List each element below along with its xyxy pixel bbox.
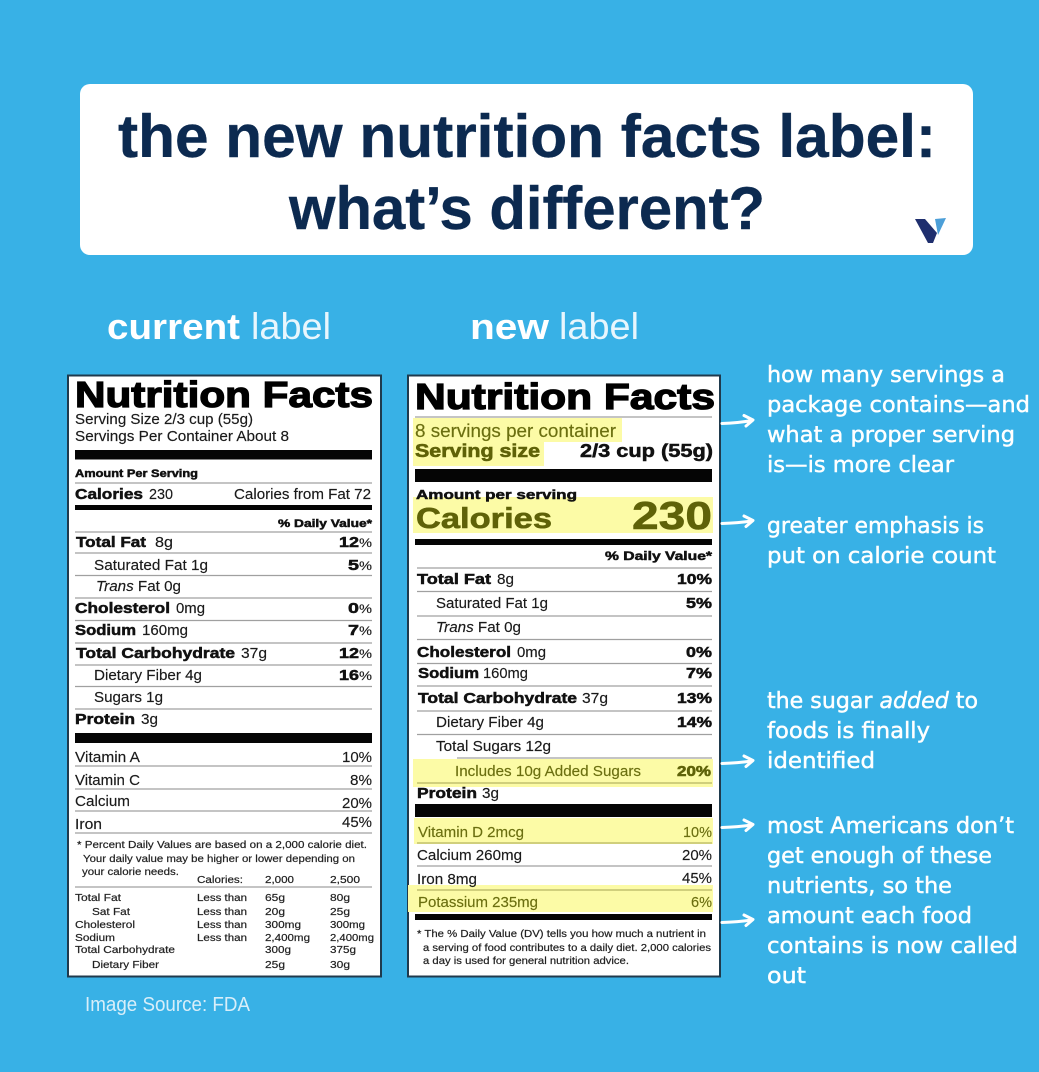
callout: nutrients xyxy=(767,814,1018,989)
current calories section xyxy=(75,468,373,532)
current calories section: 230 xyxy=(149,487,173,503)
current nutrient rows: % xyxy=(359,647,372,661)
new serving information: 2/3 cup (55g) xyxy=(580,441,713,461)
current nutrient rows: % xyxy=(359,624,372,638)
heading: new label: label xyxy=(559,306,639,347)
callout: calories: put on calorie count xyxy=(767,544,996,569)
heading: new label xyxy=(470,306,639,347)
current daily values table: 375g xyxy=(330,945,356,956)
current serving information xyxy=(75,412,372,460)
current daily values table: 20g xyxy=(265,907,285,918)
current calories section: Calories from Fat 72 xyxy=(234,487,371,503)
current daily values table: 2,400mg xyxy=(265,933,310,944)
current nutrient rows: Sugars 1g xyxy=(94,690,163,706)
current footnote: Your daily value may be higher or lower depending on xyxy=(83,854,355,865)
icon: brand V logo xyxy=(915,218,946,243)
current calories section: Calories xyxy=(75,487,143,503)
current vitamins and minerals: Vitamin A xyxy=(75,750,140,766)
current nutrient rows: 7 xyxy=(348,623,359,639)
new serving information: 8 servings per container xyxy=(415,421,616,441)
new nutrient rows: 0% xyxy=(686,645,712,661)
new vitamin D highlighted row xyxy=(414,818,713,844)
current daily values table: Less than xyxy=(197,893,247,904)
callout: added sugars: foods is finally xyxy=(767,719,930,744)
current daily values table: 300mg xyxy=(330,920,365,931)
new calories section: Amount per serving xyxy=(416,487,577,502)
new potassium highlighted row xyxy=(408,885,713,920)
heading: new label: new xyxy=(470,306,550,347)
current nutrient rows: Protein xyxy=(75,712,135,728)
current nutrient rows: 12 xyxy=(339,535,359,551)
current footnote xyxy=(75,840,372,887)
heading: current label: label xyxy=(251,306,331,347)
callout: nutrients: out xyxy=(767,964,806,989)
current daily values table: Less than xyxy=(197,907,247,918)
callout: calories: greater emphasis is xyxy=(767,514,984,539)
current nutrient rows: 37g xyxy=(241,646,267,662)
current daily values table: 25g xyxy=(265,960,285,971)
new calcium and iron rows: 20% xyxy=(682,848,712,864)
current serving information: Serving Size 2/3 cup (55g) xyxy=(75,412,253,428)
new nutrient rows: Total Fat xyxy=(417,572,491,588)
current vitamins and minerals: Vitamin C xyxy=(75,773,140,789)
current vitamins and minerals: 8% xyxy=(350,773,372,789)
new serving information xyxy=(413,418,713,482)
current daily values table: Total Fat xyxy=(75,893,121,904)
new protein row xyxy=(415,786,712,817)
new nutrient rows: 13% xyxy=(677,691,712,707)
current daily values table: Less than xyxy=(197,933,247,944)
new calcium and iron rows: 45% xyxy=(682,871,712,887)
arrow: calories xyxy=(722,516,753,526)
current nutrient rows: 160mg xyxy=(142,623,188,639)
current daily values table: 80g xyxy=(330,893,350,904)
current daily values table: 2,400mg xyxy=(330,933,374,944)
current nutrient rows: Cholesterol xyxy=(75,601,170,617)
arrow: vitamin D xyxy=(722,820,753,830)
new nutrient rows: 37g xyxy=(582,691,608,707)
heading: current label xyxy=(107,306,331,347)
new protein row: 3g xyxy=(482,786,499,802)
heading: current label: current xyxy=(107,306,240,347)
new nutrient rows: Dietary Fiber 4g xyxy=(436,715,544,731)
current nutrient rows: Saturated Fat 1g xyxy=(94,558,208,574)
current daily values table: Sodium xyxy=(75,933,115,944)
current footnote: * Percent Daily Values are based on a 2,000 calorie diet. xyxy=(77,840,367,851)
new nutrient rows: Trans Fat 0g xyxy=(436,620,521,636)
current label heading: Nutrition Facts xyxy=(75,374,373,415)
heading: the new nutrition facts label: xyxy=(118,103,936,170)
new nutrient rows: 10% xyxy=(677,572,712,588)
arrow: servings xyxy=(722,416,753,426)
current nutrient rows: 3g xyxy=(141,712,158,728)
current nutrient rows: 5 xyxy=(348,558,359,574)
current daily values table: Total Carbohydrate xyxy=(75,945,176,956)
new calcium and iron rows: Calcium 260mg xyxy=(417,848,522,864)
new calcium and iron rows xyxy=(417,848,712,888)
current daily values table: 65g xyxy=(265,893,285,904)
new footnote: * The % Daily Value (DV) tells you how much a nutrient in xyxy=(417,929,706,940)
callout: servings xyxy=(767,363,1030,478)
panel: new nutrition label xyxy=(408,376,720,976)
current vitamins and minerals: Calcium xyxy=(75,794,130,810)
current nutrient rows: 8g xyxy=(155,535,173,551)
new footnote: a day is used for general nutrition advice. xyxy=(423,956,629,967)
new vitamin D highlighted row: Vitamin D 2mcg xyxy=(418,824,524,841)
current footnote: Calories: xyxy=(197,875,243,886)
current daily values table: 30g xyxy=(330,960,350,971)
new potassium highlighted row: Potassium 235mg xyxy=(418,894,538,911)
callout: servings: package contains—and xyxy=(767,393,1030,418)
current nutrient rows: Dietary Fiber 4g xyxy=(94,668,202,684)
callout: nutrients: most Americans don’t xyxy=(767,814,1014,839)
new nutrient rows: 5% xyxy=(686,596,712,612)
callout: added sugars: the sugar added to xyxy=(767,689,978,714)
new calories section: 230 xyxy=(632,495,712,538)
current daily values table: Cholesterol xyxy=(75,920,135,931)
callout: nutrients: get enough of these xyxy=(767,844,992,869)
current footnote: your calorie needs. xyxy=(82,867,179,878)
current daily values table: Less than xyxy=(197,920,247,931)
new calories section xyxy=(413,487,713,568)
current vitamins and minerals xyxy=(75,750,372,833)
title panel xyxy=(80,84,973,255)
new nutrient rows: 8g xyxy=(497,572,514,588)
callout: added sugars: identified xyxy=(767,749,875,774)
current vitamins and minerals: 45% xyxy=(342,815,372,831)
new nutrient rows: Total Carbohydrate xyxy=(418,691,577,707)
current nutrient rows: % xyxy=(359,559,372,573)
arrow: added sugars xyxy=(722,756,753,766)
current vitamins and minerals: 10% xyxy=(342,750,372,766)
current nutrient rows: 0mg xyxy=(176,601,205,617)
callout: nutrients: nutrients, so the xyxy=(767,874,952,899)
current nutrient rows: Sodium xyxy=(75,623,136,639)
new added sugars highlighted row: 20% xyxy=(677,764,711,780)
current vitamins and minerals: Iron xyxy=(75,817,102,833)
current daily values table: Dietary Fiber xyxy=(92,960,160,971)
current daily values table xyxy=(75,893,374,971)
new footnote: a serving of food contributes to a daily diet. 2,000 calories xyxy=(423,943,711,954)
new nutrient rows: 7% xyxy=(686,666,712,682)
callout: added sugars xyxy=(767,689,978,774)
image source credit: Image Source: FDA xyxy=(85,994,251,1016)
new nutrient rows: Cholesterol xyxy=(417,645,511,661)
current nutrient rows: Total Fat xyxy=(76,535,146,551)
heading xyxy=(118,103,936,242)
current calories section: % Daily Value* xyxy=(278,518,373,530)
new nutrient rows: Sodium xyxy=(418,666,479,682)
current calories section: Amount Per Serving xyxy=(75,468,198,480)
current footnote: 2,000 xyxy=(265,875,295,886)
new vitamin D highlighted row: 10% xyxy=(683,824,712,841)
callout: servings: is—is more clear xyxy=(767,453,955,478)
new protein row: Protein xyxy=(417,786,477,802)
current nutrient rows: 12 xyxy=(339,646,359,662)
new nutrient rows: 160mg xyxy=(483,666,528,682)
arrow: potassium xyxy=(722,915,753,926)
current nutrient rows: % xyxy=(359,536,372,550)
new nutrient rows: 0mg xyxy=(517,645,546,661)
new calories section: % Daily Value* xyxy=(605,549,712,563)
new calories section: Calories xyxy=(416,503,552,535)
callout: servings: what a proper serving xyxy=(767,423,1015,448)
current nutrient rows: Trans Fat 0g xyxy=(96,579,181,595)
current nutrient rows: Total Carbohydrate xyxy=(76,646,235,662)
current nutrient rows xyxy=(75,535,372,743)
heading: what’s different? xyxy=(288,175,765,242)
new calcium and iron rows: Iron 8mg xyxy=(417,872,477,888)
new added sugars highlighted row: Includes 10g Added Sugars xyxy=(455,763,641,780)
new potassium highlighted row: 6% xyxy=(691,894,712,911)
current nutrient rows: 16 xyxy=(339,668,359,684)
new serving information: Serving size xyxy=(415,441,540,461)
new nutrient rows: Saturated Fat 1g xyxy=(436,596,548,612)
current daily values table: 300g xyxy=(265,945,291,956)
new nutrient rows: 14% xyxy=(677,715,712,731)
current vitamins and minerals: 20% xyxy=(342,796,372,812)
current daily values table: 25g xyxy=(330,907,350,918)
panel: current nutrition label xyxy=(68,374,381,976)
current nutrient rows: % xyxy=(359,602,372,616)
callout: nutrients: contains is now called xyxy=(767,934,1018,959)
current daily values table: 300mg xyxy=(265,920,301,931)
new label heading: Nutrition Facts xyxy=(415,376,715,417)
current footnote: 2,500 xyxy=(330,875,361,886)
current nutrient rows: % xyxy=(359,669,372,683)
current nutrient rows: 0 xyxy=(348,601,359,617)
current daily values table: Sat Fat xyxy=(92,907,130,918)
callout: nutrients: amount each food xyxy=(767,904,972,929)
callout: calories xyxy=(767,514,996,569)
new nutrient rows xyxy=(417,572,712,758)
new added sugars highlighted row xyxy=(413,759,713,787)
new footnote xyxy=(417,929,711,967)
current serving information: Servings Per Container About 8 xyxy=(75,429,289,445)
new nutrient rows: Total Sugars 12g xyxy=(436,739,551,755)
callout: servings: how many servings a xyxy=(767,363,1005,388)
